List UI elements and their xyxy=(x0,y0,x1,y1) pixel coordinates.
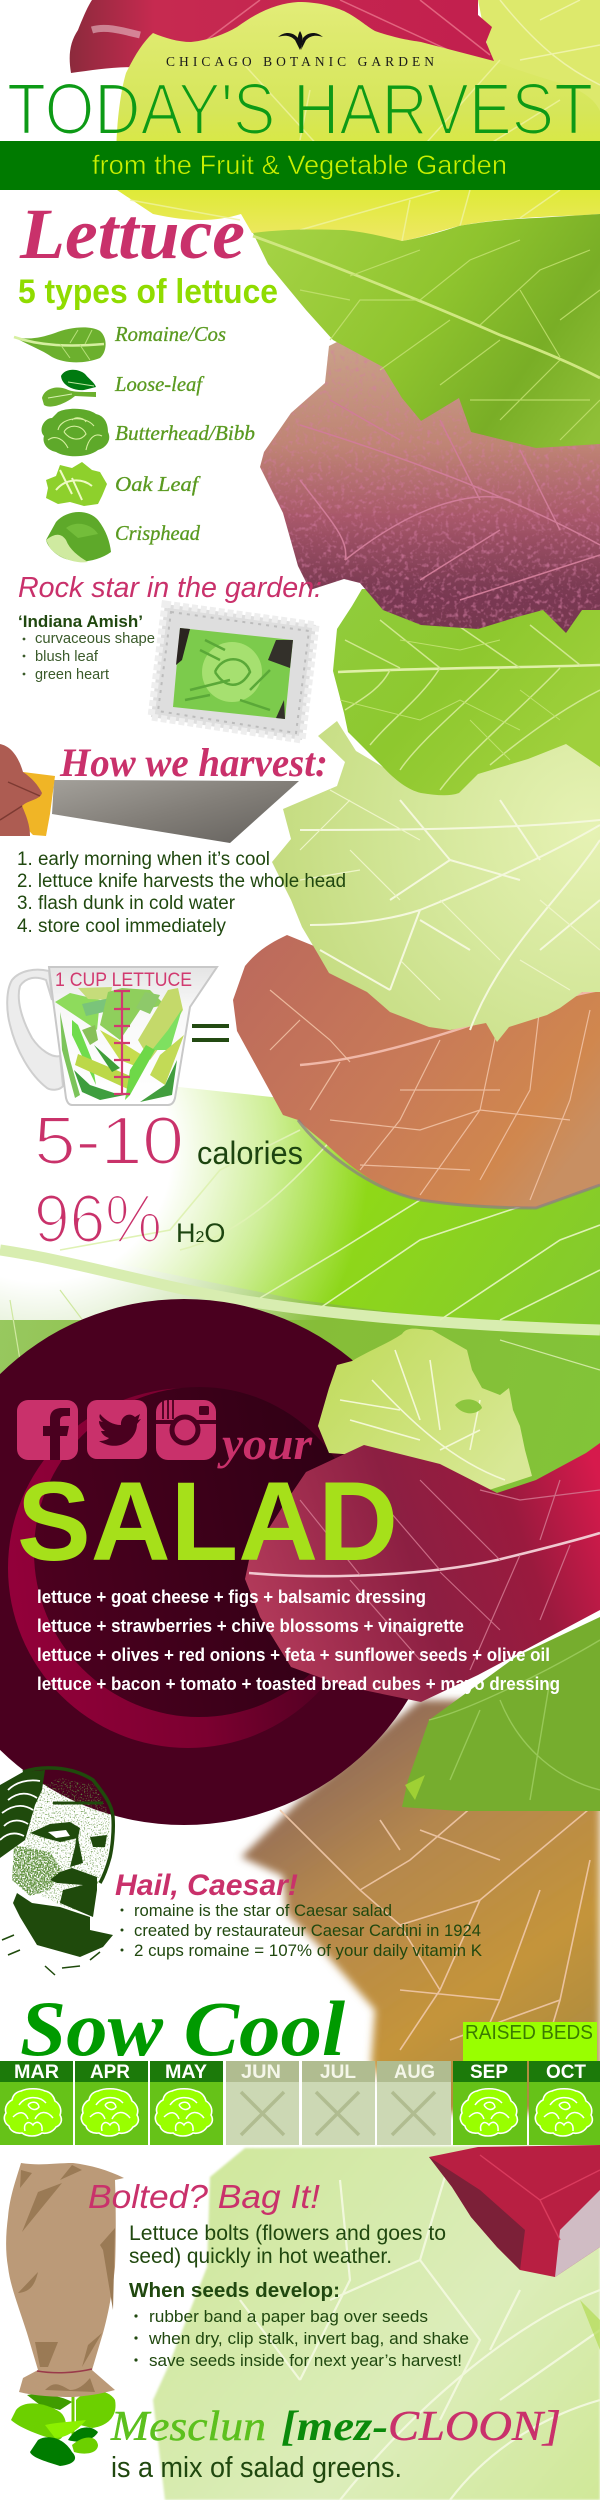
icon: hand and harvest knife xyxy=(0,744,299,843)
photo: romaine leaf xyxy=(253,214,600,448)
photo: yellow dome leaf xyxy=(116,2,600,241)
harvest steps list: 4. store cool immediately xyxy=(17,916,226,937)
photo: brown orange leaf xyxy=(241,1700,600,2113)
heading: salad: SALAD xyxy=(17,1459,398,1584)
label: loose-leaf: Loose-leaf xyxy=(114,372,205,396)
icon: romaine xyxy=(14,327,106,362)
stat: calories xyxy=(34,1103,303,1179)
month: september: SEP xyxy=(470,2062,508,2083)
label: crisphead: Crisphead xyxy=(115,521,200,545)
month: april xyxy=(75,2061,148,2145)
illustration: caesar bust xyxy=(0,1768,113,1975)
text: hail caesar xyxy=(115,1869,482,1960)
heading: mesclun xyxy=(110,2404,561,2450)
equals sign xyxy=(192,1024,229,1042)
photo: bottom red leaf xyxy=(429,2145,600,2277)
salad recipes list: lettuce + goat cheese + figs + balsamic dressing xyxy=(37,1587,426,1607)
raised beds tag xyxy=(463,2022,597,2061)
text: hail caesar: romaine is the star of Caesar salad xyxy=(134,1902,392,1920)
icon: butterhead xyxy=(42,409,109,456)
stat: calories: 5-10 xyxy=(34,1103,184,1179)
stat: water content: H2O xyxy=(176,1218,225,1248)
text: indiana amish: ‘Indiana Amish’ xyxy=(18,613,143,631)
heading: rock star: Rock star in the garden: xyxy=(18,572,322,604)
text: when seeds develop xyxy=(129,2280,469,2370)
photo: pale frilly lettuce leaf xyxy=(272,700,600,1042)
month: june xyxy=(226,2061,299,2145)
month: august: AUG xyxy=(394,2062,435,2083)
illustration: seedling xyxy=(11,2391,116,2466)
photo: crimson leaf xyxy=(245,1443,600,1702)
photo: lower right green leaf xyxy=(402,1617,600,1811)
icon: oak leaf xyxy=(46,462,107,506)
harvest steps list: 1. early morning when it’s cool xyxy=(17,849,270,870)
text: when seeds develop: save seeds inside for next year’s harvest! xyxy=(149,2351,462,2370)
month: october: OCT xyxy=(546,2062,586,2083)
text: when seeds develop: rubber band a paper bag over seeds xyxy=(149,2307,428,2326)
icon: twitter xyxy=(87,1400,147,1459)
maroon disc xyxy=(0,1299,447,1825)
heading: mesclun: [mez- xyxy=(281,2404,388,2450)
photo: top red leaf xyxy=(70,0,494,80)
logo mark xyxy=(278,31,323,50)
raised beds tag: RAISED BEDS xyxy=(465,2022,593,2044)
icons: social media xyxy=(17,1400,216,1460)
salad recipes list: lettuce + strawberries + chive blossoms + vinaigrette xyxy=(37,1616,464,1636)
photo: bright green leaf xyxy=(333,589,600,795)
label: butterhead: Butterhead/Bibb xyxy=(115,421,255,445)
harvest steps list: 2. lettuce knife harvests the whole head xyxy=(17,871,346,892)
photo: top lime leaf xyxy=(470,0,600,130)
label: romaine: Romaine/Cos xyxy=(114,322,226,346)
harvest steps list: 3. flash dunk in cold water xyxy=(17,893,236,914)
month: july: JUL xyxy=(320,2062,356,2083)
month: may xyxy=(150,2061,223,2145)
icon: instagram xyxy=(156,1400,216,1460)
harvest steps list xyxy=(17,849,346,937)
icon: facebook xyxy=(17,1400,78,1460)
illustration: paper bag xyxy=(6,2163,124,2397)
text: indiana amish: green heart xyxy=(35,667,109,683)
photo: rust lettuce leaf xyxy=(233,935,600,1208)
month: april: APR xyxy=(90,2062,130,2083)
icon: loose-leaf xyxy=(42,370,96,407)
month: october xyxy=(529,2061,600,2145)
stat: calories: calories xyxy=(197,1135,303,1171)
heading: bolted: Bolted? Bag It! xyxy=(88,2178,320,2215)
heading: your: your xyxy=(217,1418,313,1469)
photo: bottom pale lettuce xyxy=(153,2145,600,2500)
heading: how we harvest: How we harvest: xyxy=(59,740,328,785)
planting calendar xyxy=(0,2061,600,2145)
month: september xyxy=(453,2061,527,2145)
text: indiana amish: blush leaf xyxy=(35,649,99,665)
text: when seeds develop: When seeds develop: xyxy=(129,2280,340,2302)
month: may: MAY xyxy=(165,2062,207,2083)
photo: large green leaf behind stats xyxy=(0,1060,600,1600)
month: june: JUN xyxy=(241,2062,281,2083)
salad recipes list: lettuce + olives + red onions + feta + sunflower seeds + olive oil xyxy=(37,1645,550,1665)
text: bolting explained xyxy=(129,2222,446,2268)
heading: mesclun: CLOON] xyxy=(388,2404,561,2450)
subtitle bar xyxy=(0,141,600,190)
salad recipes list: lettuce + bacon + tomato + toasted bread cubes + mayo dressing xyxy=(37,1674,560,1694)
picture frame with lettuce photo xyxy=(151,604,316,740)
photo: red oak leaf xyxy=(260,300,600,633)
text: indiana amish xyxy=(18,613,155,683)
text: when seeds develop: when dry, clip stalk, invert bag, and shake xyxy=(148,2329,469,2348)
heading: mesclun: Mesclun xyxy=(110,2404,266,2450)
text: hail caesar: Hail, Caesar! xyxy=(115,1869,298,1902)
month: march: MAR xyxy=(14,2062,59,2083)
stat: water content: 96% xyxy=(34,1181,162,1257)
text: mesclun definition: is a mix of salad greens. xyxy=(111,2452,402,2484)
month: march xyxy=(0,2061,73,2145)
label: oak leaf: Oak Leaf xyxy=(115,472,201,496)
text: bolting explained: seed) quickly in hot weather. xyxy=(129,2245,392,2268)
photo: small frilly lettuce xyxy=(318,1329,532,1491)
text: hail caesar: 2 cups romaine = 107% of your daily vitamin K xyxy=(134,1942,482,1960)
icon: measuring cup of lettuce xyxy=(7,967,217,1105)
month: july xyxy=(302,2061,375,2145)
salad recipes list xyxy=(37,1587,560,1694)
subtitle bar: from the Fruit & Vegetable Garden xyxy=(92,150,507,180)
month: august xyxy=(377,2061,451,2145)
text: indiana amish: curvaceous shape xyxy=(35,631,155,647)
cup label: 1 CUP LETTUCE xyxy=(55,969,192,991)
heading: lettuce: Lettuce xyxy=(19,194,245,274)
text: hail caesar: created by restaurateur Caesar Cardini in 1924 xyxy=(134,1922,481,1940)
text: bolting explained: Lettuce bolts (flowers and goes to xyxy=(129,2222,446,2245)
logo wordmark: CHICAGO BOTANIC GARDEN xyxy=(166,54,434,69)
heading: sow cool: Sow Cool xyxy=(20,1985,345,2072)
icon: crisphead xyxy=(46,512,111,562)
subheading: types of lettuce: 5 types of lettuce xyxy=(18,273,278,311)
